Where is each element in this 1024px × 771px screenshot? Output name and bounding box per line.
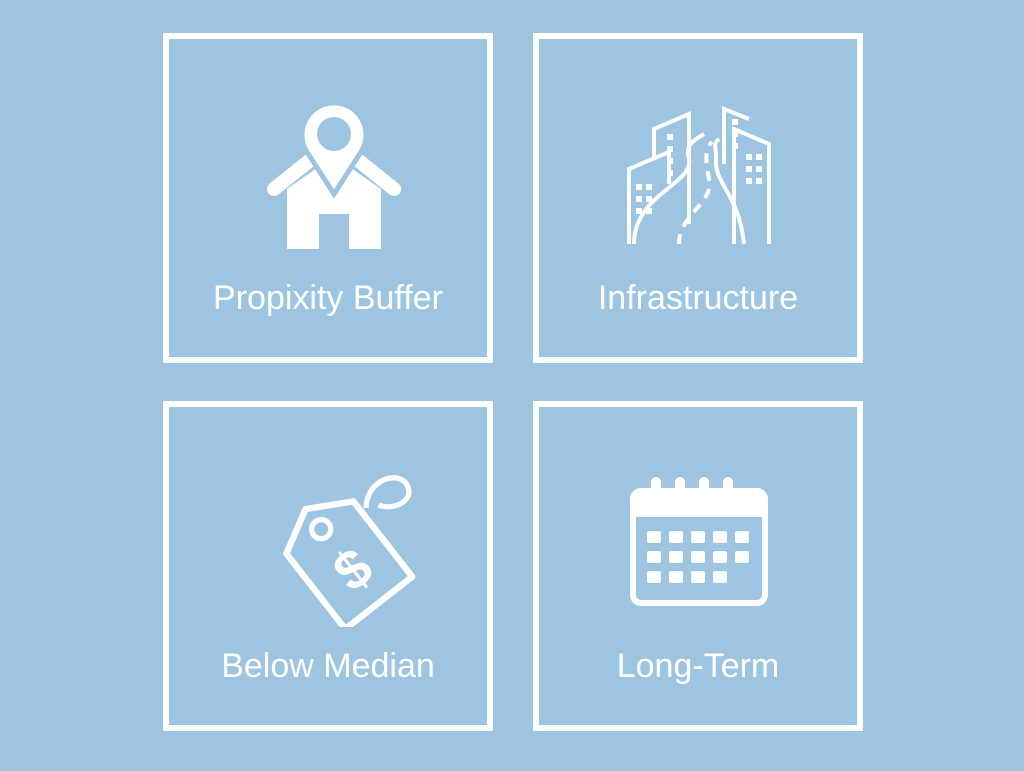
label: Propixity Buffer (213, 279, 443, 317)
icon: calendar (630, 477, 768, 606)
icon: price tag with dollar (283, 475, 416, 627)
icon: house with location pin (267, 105, 401, 249)
label: Long-Term (617, 647, 779, 685)
icon: price tag with dollar: $ (321, 536, 384, 603)
panel: Long-Term (533, 401, 863, 731)
panel: Below Median (163, 401, 493, 731)
icon: buildings and road (627, 106, 771, 244)
panel: Infrastructure (533, 33, 863, 363)
label: Below Median (221, 647, 435, 685)
label: Infrastructure (598, 279, 798, 317)
panel: Propixity Buffer (163, 33, 493, 363)
